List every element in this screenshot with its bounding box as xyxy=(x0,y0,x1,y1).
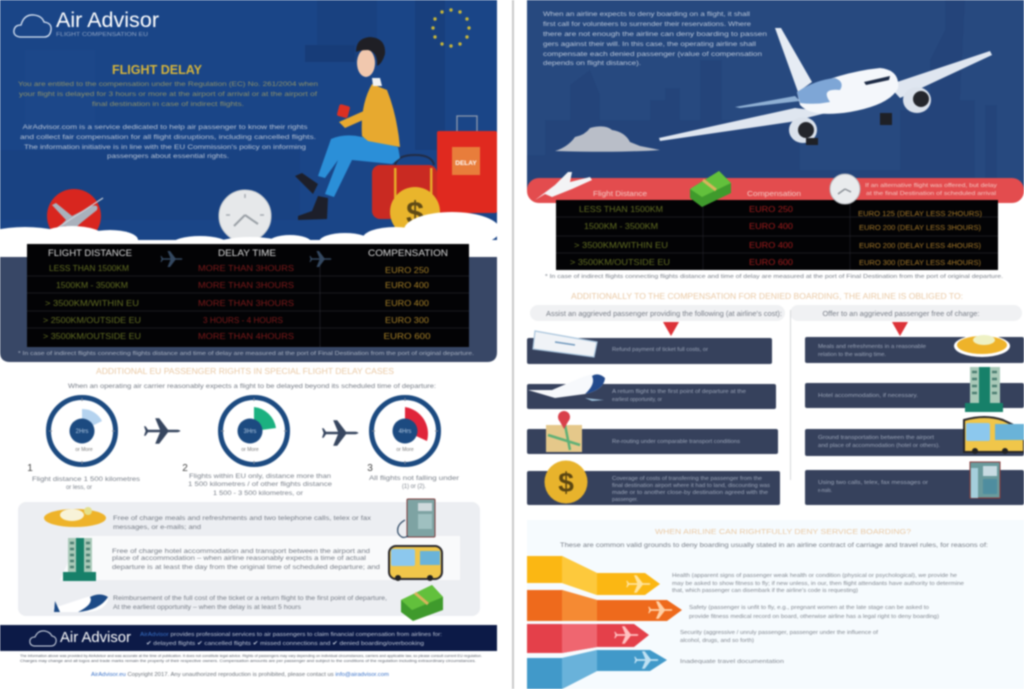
denied distance column: LESS THAN 1500KM xyxy=(579,204,663,214)
step 1 text: 1 xyxy=(27,463,33,474)
footer text xyxy=(140,632,442,647)
reason text: health: may be asked to show fitness to fly; if new unless, in our, then flight attendants have authority to determine xyxy=(672,581,964,587)
bar: meals: Meals and refreshments in a reasonable xyxy=(818,344,926,350)
denied distance column: > 3500KM/WITHIN EU xyxy=(574,240,668,250)
denied compensation column xyxy=(749,204,793,267)
heading: additional rights: ADDITIONAL EU PASSENGER RIGHTS IN SPECIAL FLIGHT DELAY CASES xyxy=(96,367,394,376)
heading: rejection: WHEN AIRLINE CAN RIGHTFULLY DENY SERVICE BOARDING? xyxy=(655,527,911,536)
bar: meals xyxy=(805,337,1024,363)
logo: Air Advisor: Air Advisor xyxy=(56,9,159,32)
boarding text: depends on flight distance). xyxy=(543,60,641,67)
delay column: MORE THAN 3HOURS xyxy=(198,263,294,273)
bar: calls: e-mails. xyxy=(818,488,832,494)
step 3 text: All flights not falling under xyxy=(369,476,459,482)
assist bars xyxy=(527,338,780,505)
bar: transfer costs xyxy=(527,471,780,505)
step 2 text: 2 xyxy=(182,463,188,474)
bar: calls xyxy=(805,470,1024,505)
icon: money stack xyxy=(401,585,443,621)
heading: flight delay: FLIGHT DELAY xyxy=(112,63,203,77)
clock: 2 hrs: 2Hrs xyxy=(76,429,88,435)
denied distance column: 1500KM - 3500KM xyxy=(584,221,658,231)
row text: hotel xyxy=(112,548,380,571)
distance column: > 3500KM/WITHIN EU xyxy=(45,298,139,308)
reason text: health: that, which passenger can disembark if the airline's code is requesting) xyxy=(672,588,858,594)
intro text: final destination in case of indirect flights. xyxy=(92,101,244,108)
red header band xyxy=(527,178,1024,203)
right hero panel xyxy=(527,0,1024,190)
icon: small grey plane xyxy=(45,198,103,236)
icon: dollar coin xyxy=(390,187,440,237)
divider xyxy=(790,310,791,480)
table: denied boarding xyxy=(556,200,998,270)
denied alternative column: EURO 200 (DELAY LESS 4HOURS) xyxy=(859,241,981,250)
icon: dollar coin small xyxy=(544,460,588,504)
ribbon: red xyxy=(527,624,649,653)
column header: assist xyxy=(530,305,785,321)
clock: 2 hrs xyxy=(48,398,116,464)
column header: offer xyxy=(790,305,1022,321)
illustration: luggage xyxy=(372,116,497,219)
step 1 text xyxy=(27,463,140,491)
icon: hotel right xyxy=(965,367,1003,412)
description text: and collect fair compensation for all flight disruptions, including cancelled flights. xyxy=(20,134,316,141)
illustration: airliner xyxy=(659,28,992,145)
icon: header plane 2 xyxy=(310,251,332,267)
footer text: AirAdvisor provides professional services to air passengers to claim financial compensation from airlines for: xyxy=(140,632,442,638)
footer logo xyxy=(30,629,131,646)
bar: transfer costs: final destination airport where it had to land, discounting was xyxy=(612,483,770,489)
icon: bus xyxy=(389,546,442,581)
bar: meals: relation to the waiting time. xyxy=(818,352,886,358)
row text: refund xyxy=(113,595,387,611)
icon: map pin xyxy=(546,411,582,452)
icon: telephone xyxy=(398,499,435,537)
arrow: plane 1 xyxy=(144,418,180,444)
icon: red sun xyxy=(47,189,101,243)
table header: DELAY TIME xyxy=(218,248,276,259)
denied alternative column: EURO 125 (DELAY LESS 2HOURS) xyxy=(858,209,982,218)
icon: clock header xyxy=(830,174,860,204)
logo: Air Advisor: FLIGHT COMPENSATION EU xyxy=(56,32,149,38)
intro text: You are entitled to the compensation under the Regulation (EC) No. 261/2004 when xyxy=(18,81,319,88)
icon: ticket xyxy=(533,331,597,357)
intro text: your flight is delayed for 3 hours or more at the airport of arrival or at the airport of xyxy=(19,91,317,98)
description text: AirAdvisor.com is a service dedicated to help air passenger to know their rights xyxy=(22,124,308,131)
illustration: woman sitting xyxy=(295,37,400,220)
ribbon: blue xyxy=(527,650,667,689)
bar: transport: Ground transportation between the airport xyxy=(818,435,934,441)
clock: 4 hrs xyxy=(372,398,438,464)
bar: re-routing xyxy=(527,384,776,409)
delay column: 3 HOURS - 4 HOURS xyxy=(203,315,283,325)
clock: 4 hrs: 4Hrs xyxy=(399,429,411,435)
arrow: plane 2 xyxy=(322,420,358,446)
step 1 text: Flight distance 1 500 kilometres xyxy=(32,477,140,483)
step 2 text: 1 500 - 3 500 kilometres, or xyxy=(213,491,303,497)
intro text xyxy=(18,81,319,108)
row text: hotel: place of accommodation – when airline reasonably expects a time of actual xyxy=(112,555,367,562)
row text: meals: Free of charge meals and refreshments and two telephone calls, telex or fax xyxy=(113,515,372,522)
table header: FLIGHT DISTANCE xyxy=(48,248,132,259)
clock: 3 hrs: 3Hrs xyxy=(244,429,256,435)
row text: refund: At the earliest opportunity – when the delay is at least 5 hours xyxy=(113,604,302,611)
panel: slate table backing xyxy=(0,257,497,362)
triangle left xyxy=(663,322,679,336)
distance column: 1500KM - 3500KM xyxy=(56,280,128,290)
reason text: security: alcohol, drugs, and so forth) xyxy=(680,638,754,644)
compensation column: EURO 300 xyxy=(385,315,429,325)
boarding text: gers against their will. In this case, the operating airline shall xyxy=(543,41,757,48)
reason text: documents: Inadequate travel documentation xyxy=(680,659,784,665)
footnote: left table: * In case of indirect flights connecting flights distance and time of delay are measured at the port of Final Destination from the port of original departure. xyxy=(18,351,474,357)
step 1 text: or less, or xyxy=(66,485,92,491)
icon: dollar coin: $ xyxy=(406,195,424,231)
icon: header plane 1 xyxy=(160,251,182,267)
table: flight delay compensation xyxy=(27,244,469,347)
band label: reroute: at the final Destination of scheduled arrival xyxy=(866,191,996,197)
distance column: LESS THAN 1500KM xyxy=(49,263,129,273)
compensation column: EURO 400 xyxy=(385,298,429,308)
row text: meals: messages, or e-mails; and xyxy=(113,524,201,531)
bar: accommodation: Hotel accommodation, if necessary. xyxy=(818,393,918,399)
fine print: The information above was provided by AirAdvisor and was accurate at the time of publication. It does not constitute legal advice. Rights of passengers may vary depending on individual circumstances, carriers and applicable law, so please consult current EU regulation. xyxy=(20,654,482,658)
footer logo: Air Advisor xyxy=(60,629,131,646)
clock: 4 hrs: or More xyxy=(396,447,414,453)
icon: blue white plane xyxy=(53,594,108,612)
step 3 text xyxy=(367,463,459,490)
boarding text: there are not enough the airline can deny boarding to passen xyxy=(543,31,767,38)
bar: transfer costs: passenger. xyxy=(612,497,638,503)
row text: refund: Reimbursement of the full cost of the ticket or a return flight to the first point of departure, xyxy=(113,595,387,602)
distance column: > 3500KM/OUTSIDE EU xyxy=(43,331,141,341)
table header xyxy=(48,248,448,259)
clock: 2 hrs: or More xyxy=(75,447,93,453)
compensation column: EURO 400 xyxy=(385,280,429,290)
bar: re-routing: A return flight to the first point of departure at the xyxy=(612,389,746,395)
illustration: luggage: DELAY xyxy=(455,160,477,167)
panel: delay assistance xyxy=(18,502,480,616)
icon: white plane xyxy=(535,172,592,200)
reason text: security: Security (aggressive / unruly passenger, passenger under the influence of xyxy=(680,630,878,636)
table header: COMPENSATION xyxy=(368,248,448,259)
bar: re-routing comparable: Re-routing under comparable transport conditions xyxy=(612,439,740,445)
triangle right xyxy=(892,322,908,336)
row text: hotel: Free of charge hotel accommodation and transport between the airport and xyxy=(112,548,370,555)
bar: refund: Refund payment of ticket full costs, or xyxy=(612,347,708,353)
ribbon: yellow xyxy=(527,556,660,595)
icon: money stack header xyxy=(690,171,731,207)
step 2 text: Flights within EU only, distance more than xyxy=(189,474,331,480)
reason text: safety: provide fitness medical record on board, otherwise airline has a legal right to deny boarding) xyxy=(689,614,939,620)
denied alternative column: EURO 200 (DELAY LESS 3HOURS) xyxy=(859,223,981,232)
page divider xyxy=(512,0,514,689)
offer bars xyxy=(805,337,1024,505)
column header: assist: Assist an aggrieved passenger providing the following (at airline's cost): xyxy=(546,311,782,318)
icon: EU stars xyxy=(431,8,471,48)
boarding text: first call for volunteers to surrender their reservations. Where xyxy=(543,21,751,28)
bar: calls: Using two calls, telex, fax messages or xyxy=(818,480,928,486)
footnote: right table: * In case of indirect flights connecting flights distance and time of delay are measured at the port of Final Destination from the port of original departure. xyxy=(545,274,1003,280)
icon: dollar coin small: $ xyxy=(558,467,574,498)
column header: offer: Offer to an aggrieved passenger free of charge: xyxy=(822,311,980,318)
reason text: safety: Safety (passenger is unfit to fly, e.g., pregnant women at the late stage can be asked to xyxy=(689,605,929,611)
step 2 text xyxy=(182,463,333,497)
distance column xyxy=(43,263,141,341)
denied compensation column: EURO 250 xyxy=(749,204,793,214)
boarding text xyxy=(543,11,767,67)
denied compensation column: EURO 400 xyxy=(749,221,793,231)
reason text: safety xyxy=(689,605,939,620)
logo: Air Advisor xyxy=(14,9,159,38)
subheading: rejection: These are common valid grounds to deny boarding usually stated in an airline contract of carriage and travel rules, for reasons of: xyxy=(560,542,988,549)
bar: re-routing: earliest opportunity, or xyxy=(612,397,662,403)
boarding text: compensate each denied passenger (value of compensation xyxy=(543,51,762,58)
denied alternative column xyxy=(858,209,982,267)
reason text: health: Health (apparent signs of passenger weak health or condition (physical or psychological), we provide he xyxy=(672,573,957,579)
row text: meals xyxy=(113,515,372,531)
icon: telephone right xyxy=(970,462,1000,498)
footer text: ✔ delayed flights ✔ cancelled flights ✔ missed connections and ✔ denied boarding/overbooking xyxy=(146,641,424,647)
subheading: When an operating air carrier reasonably expects a flight to be delayed beyond its scheduled time of departure: xyxy=(68,383,436,390)
left hero panel xyxy=(0,0,497,240)
heading: denied boarding obligations: ADDITIONALLY TO THE COMPENSATION FOR DENIED BOARDING, THE AIRLINE IS OBLIGED TO: xyxy=(571,292,963,301)
denied alternative column: EURO 300 (DELAY LESS 4HOURS) xyxy=(859,258,981,267)
denied compensation column: EURO 400 xyxy=(749,240,793,250)
compensation column: EURO 600 xyxy=(384,331,431,341)
bar: transfer costs: made or to another close-by destination agreed with the xyxy=(612,490,768,496)
delay column xyxy=(198,263,294,341)
step 2 text: 1 500 kilometres / of other flights distance xyxy=(188,482,333,488)
bar: transfer costs: Coverage of costs of transferring the passenger from the xyxy=(612,476,762,482)
icon: food plate right xyxy=(954,335,1010,357)
panel: rejection section xyxy=(527,520,1024,689)
clock: 3 hrs: or More xyxy=(241,447,259,453)
bar: transport: and place of accommodation (hotel or others). xyxy=(818,443,940,449)
clock: 3 hrs xyxy=(220,398,288,464)
clouds xyxy=(0,212,500,258)
compensation column xyxy=(384,265,431,341)
delay column: MORE THAN 3HOURS xyxy=(198,280,294,290)
step 3 text: (1) or (2). xyxy=(402,484,426,490)
description text: The information initiative is in line with the EU Commission's policy on informing xyxy=(24,144,307,151)
icon: bus right xyxy=(964,417,1024,454)
compensation column: EURO 250 xyxy=(385,265,429,275)
band label: reroute: If an alternative flight was offered, but delay xyxy=(865,183,997,189)
footer band xyxy=(0,625,497,651)
ribbon: orange xyxy=(527,590,682,621)
bar: refund xyxy=(527,338,772,364)
fine print xyxy=(20,654,482,663)
denied compensation column: EURO 600 xyxy=(749,257,793,267)
bar: re-routing comparable xyxy=(527,429,778,454)
delay column: MORE THAN 4HOURS xyxy=(198,331,294,341)
bar: accommodation xyxy=(805,383,1024,408)
step 3 text: 3 xyxy=(367,463,373,474)
fine print: Charges may change and all logos and trade marks remain the property of their respective owners. Compensation amounts are per passenger and subject to the conditions of the regulation including extraordinary circumstances. xyxy=(20,659,476,663)
icon: food plate xyxy=(44,507,106,527)
description text: passengers about essential rights. xyxy=(107,153,229,160)
band label: compensation: Compensation xyxy=(747,191,801,198)
delay column: MORE THAN 3HOURS xyxy=(198,298,294,308)
band label: flight distance: Flight Distance xyxy=(593,191,647,198)
icon: plane blue nose xyxy=(528,374,605,401)
reason text: security xyxy=(680,630,878,644)
row text: hotel: departure is at least the day from the original time of scheduled departure; and xyxy=(112,564,380,571)
distance column: > 2500KM/OUTSIDE EU xyxy=(43,315,141,325)
boarding text: When an airline expects to deny boarding on a flight, it shall xyxy=(543,11,751,18)
denied distance column xyxy=(570,204,670,267)
description text xyxy=(20,124,316,160)
band label: reroute xyxy=(865,183,997,197)
bar: transport xyxy=(805,429,1024,456)
denied distance column: > 3500KM/OUTSIDE EU xyxy=(570,257,670,267)
icon: clock xyxy=(219,190,271,242)
icon: hotel building xyxy=(63,538,96,581)
reason text: health xyxy=(672,573,964,594)
copyright: AirAdvisor.eu Copyright 2017. Any unauthorized reproduction is prohibited, please contact us info@airadvisor.com xyxy=(91,672,390,678)
illustration: grey cloud xyxy=(555,126,660,152)
